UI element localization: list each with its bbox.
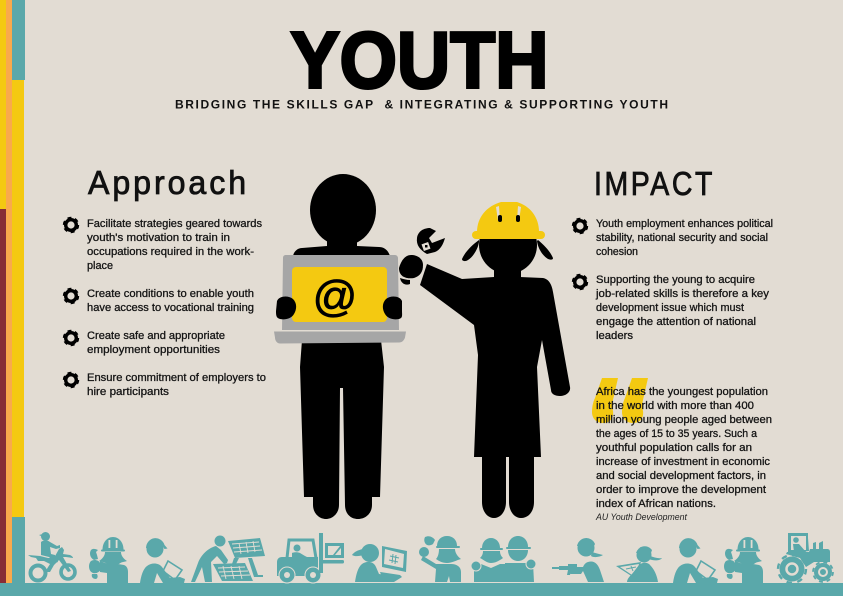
approach bullet list: have access to vocational training [87,302,254,314]
quote text: and social development factors, in [596,470,766,482]
heading: approach: Approach [88,164,249,201]
impact bullet list [573,218,773,342]
figure: worker with wrench and hard hat [399,202,570,518]
approach bullet list: youth's motivation to train in [87,232,230,244]
icon: two workers [471,536,536,582]
footer icon row [28,532,833,583]
icon: person with drill [552,538,604,582]
approach bullet list: hire participants [87,386,169,398]
approach bullet list: Facilitate strategies geared towards [87,218,262,230]
hand [399,255,423,278]
quote text: youthful population calls for an [596,442,752,454]
icon: person with blueprint [616,546,662,582]
subtitle: BRIDGING THE SKILLS GAP & INTEGRATING & SUPPORTING YOUTH [175,98,668,112]
quote text: the ages of 15 to 35 years. Such a [596,428,758,440]
quote text: AU Youth Development [595,512,687,522]
quote text: Africa has the youngest population [596,386,768,398]
impact bullet list: leaders [596,330,633,342]
icon: worker with wrench [89,537,128,583]
quote text: index of African nations. [596,498,716,510]
approach bullet list: occupations required in the work- [87,246,254,258]
impact bullet list: Youth employment enhances political [596,218,773,230]
impact bullet list: job-related skills is therefore a key [595,288,769,300]
icon: worker raising wrench [419,536,461,582]
approach bullet list: employment opportunities [87,344,220,356]
quote text: in the world with more than 400 [596,400,754,412]
icon: solar panel installer [191,536,265,582]
quote text: order to improve the development [596,484,767,496]
icon: person at monitor [352,544,407,582]
icon: tractor [778,533,833,583]
wrench [417,228,445,254]
icon: forklift [277,533,344,583]
icon: person with tablet [140,538,185,583]
laptop [274,255,406,344]
icon: quotation mark [592,378,648,423]
bullet icon: gear [573,219,587,233]
quote text [595,386,772,522]
figure: person with laptop [274,174,406,519]
approach bullet list: Create conditions to enable youth [87,288,254,300]
quote text: million young people aged between [596,414,772,426]
heading: impact: IMPACT [594,165,715,202]
icon: motorbike rider [28,532,75,580]
icon: worker with wrench, second [724,537,763,583]
hard hat [472,202,545,239]
impact bullet list: Supporting the young to acquire [596,274,755,286]
impact bullet list: cohesion [596,246,638,258]
approach bullet list [64,218,266,398]
approach bullet list: place [87,260,113,272]
quote text: increase of investment in economic [596,456,770,468]
bullet icon: gear [64,218,78,232]
laptop: @ [313,272,357,321]
hands [276,297,296,319]
impact bullet list: stability, national security and social [596,232,768,244]
head and hair [462,216,553,280]
body with arms [420,264,570,457]
approach bullet list: Create safe and appropriate [87,330,225,342]
icon: person with tablet, second [673,538,718,583]
impact bullet list: development issue which must [596,302,745,314]
title: YOUTH [290,16,548,104]
approach bullet list: Ensure commitment of employers to [87,372,266,384]
impact bullet list: engage the attention of national [596,316,756,328]
